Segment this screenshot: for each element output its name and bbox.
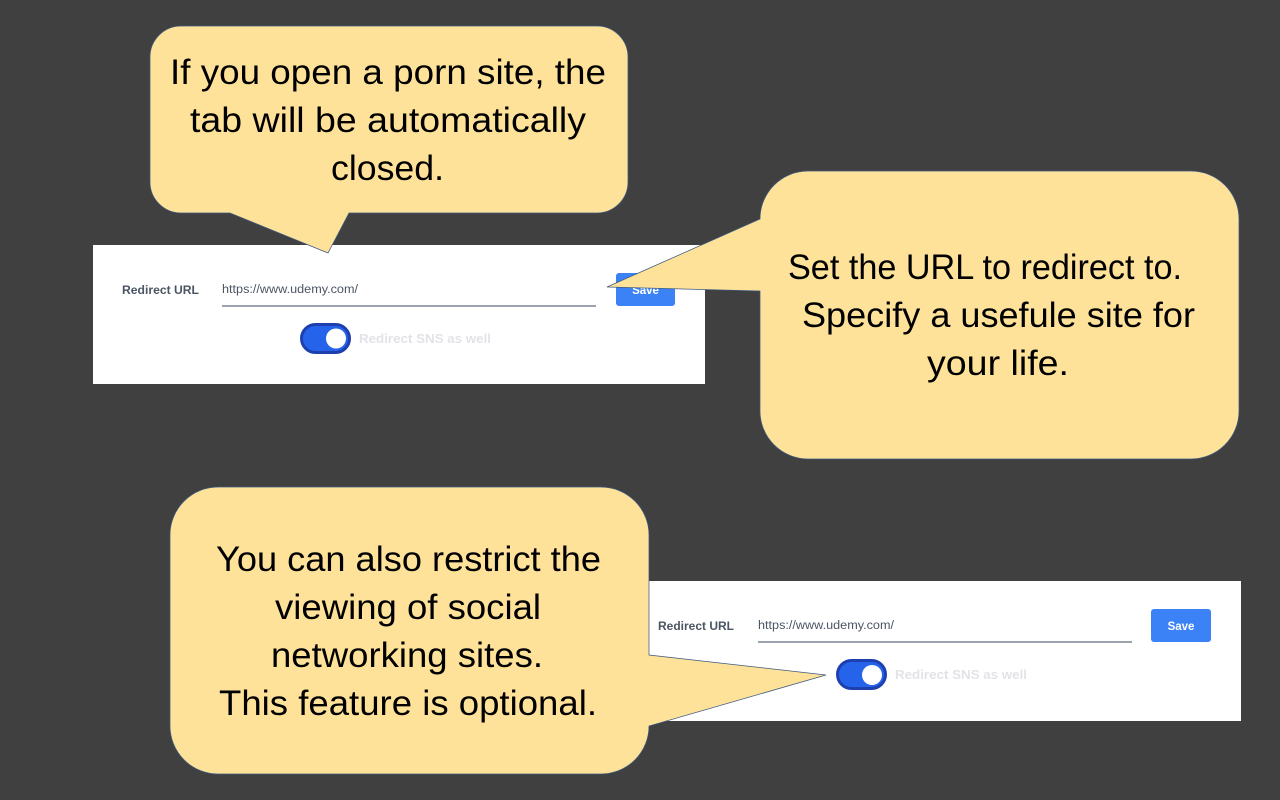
panel: top settings form bbox=[93, 245, 705, 384]
input value: URL: https://www.udemy.com/ bbox=[222, 284, 359, 296]
callout: restrict social networking sites bbox=[170, 487, 826, 774]
toggle label: Redirect SNS as well bbox=[895, 668, 1027, 682]
input value: URL: https://www.udemy.com/ bbox=[758, 620, 895, 632]
panel: bottom settings form bbox=[649, 581, 1241, 721]
callout text: If you open a porn site, the bbox=[170, 53, 606, 92]
callout text: your life. bbox=[927, 344, 1069, 383]
button: save bbox=[616, 273, 675, 306]
callout text: Set the URL to redirect to. bbox=[788, 248, 1182, 287]
callout text: Specify a usefule site for bbox=[802, 296, 1195, 335]
callout text bbox=[788, 248, 1195, 383]
callout: tab closes automatically bbox=[150, 26, 628, 253]
label: redirect URL: Redirect URL bbox=[122, 285, 199, 297]
callout text: tab will be automatically bbox=[190, 101, 587, 140]
callout text: closed. bbox=[331, 149, 444, 188]
callout: set redirect URL bbox=[607, 171, 1239, 459]
callout text bbox=[216, 540, 601, 723]
toggle label: Redirect SNS as well bbox=[359, 332, 491, 346]
button: save bbox=[1151, 609, 1211, 642]
label: redirect URL: Redirect URL bbox=[658, 621, 734, 633]
callout text bbox=[170, 53, 606, 188]
input underline bbox=[758, 641, 1132, 643]
callout text: networking sites. bbox=[271, 636, 543, 675]
toggle: on bbox=[838, 660, 886, 688]
toggle: on bbox=[302, 324, 350, 352]
input underline bbox=[222, 305, 596, 307]
button: save: Save bbox=[632, 285, 659, 297]
callout text: viewing of social bbox=[275, 588, 541, 627]
button: save: Save bbox=[1168, 621, 1194, 633]
callout text: You can also restrict the bbox=[216, 540, 601, 579]
callout text: This feature is optional. bbox=[219, 684, 597, 723]
